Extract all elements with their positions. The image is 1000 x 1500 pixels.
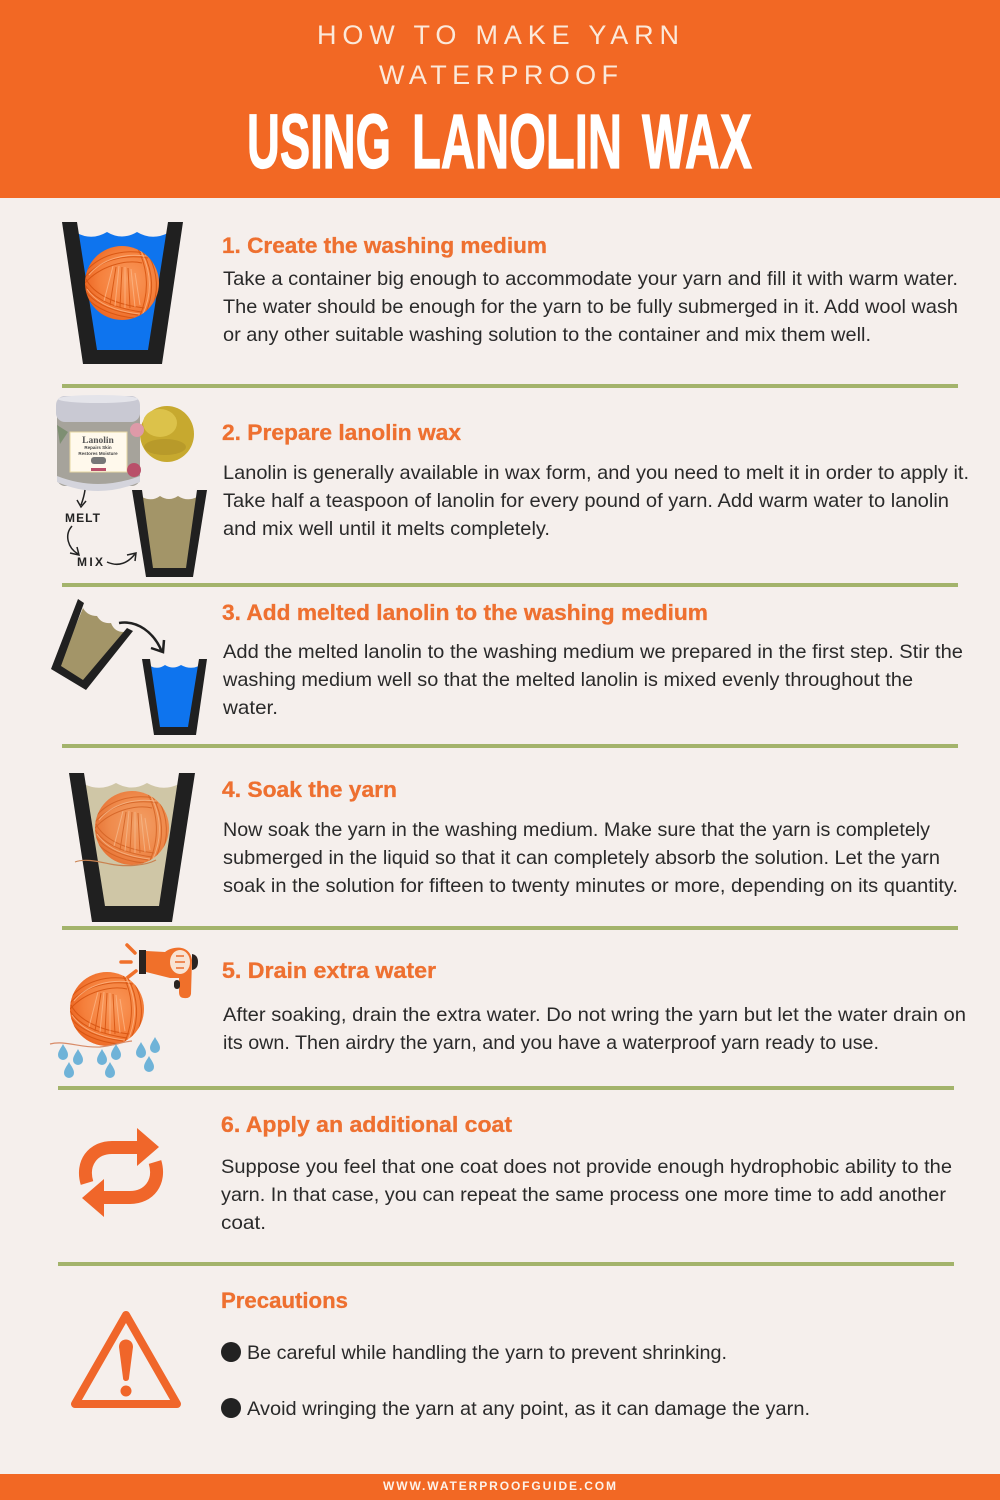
step 6 text xyxy=(221,1112,952,1234)
step 5 text: its own. Then airdry the yarn, and you have a waterproof yarn ready to use. xyxy=(223,1032,879,1054)
tilted glass of lanolin xyxy=(51,599,133,690)
step 2 text: 2. Prepare lanolin wax xyxy=(222,420,462,445)
lanolin wax blob xyxy=(140,406,194,462)
precautions icon: warning triangle xyxy=(75,1315,177,1404)
title: how to make yarn waterproof: HOW TO MAKE YARN xyxy=(317,20,679,50)
arrow: melt to mix xyxy=(68,526,79,555)
label: melt: MELT xyxy=(65,511,101,525)
title: using lanolin wax: WAX xyxy=(642,99,752,185)
pink flowers on jar xyxy=(127,423,144,477)
lanolin jar: Repairs Skin xyxy=(84,445,112,450)
loose thread xyxy=(50,1041,132,1047)
step 1 text: Take a container big enough to accommodate your yarn and fill it with warm water. xyxy=(223,268,958,290)
step 2 text: Lanolin is generally available in wax form, and you need to melt it in order to apply it. xyxy=(223,462,969,484)
footer bar xyxy=(0,1474,1000,1500)
title: using lanolin wax xyxy=(247,99,752,185)
step 1 text xyxy=(222,233,958,346)
label: mix: MIX xyxy=(77,555,103,569)
lanolin jar: Restores Moisture xyxy=(78,451,118,456)
step 2 text xyxy=(222,420,969,540)
step 5 text: 5. Drain extra water xyxy=(222,958,436,983)
step 2 icon: lanolin jar, melt and mix xyxy=(56,395,207,577)
step 3 text: 3. Add melted lanolin to the washing medium xyxy=(222,600,708,625)
title: how to make yarn waterproof: WATERPROOF xyxy=(379,60,618,90)
step 5 text: After soaking, drain the extra water. Do not wring the yarn but let the water drain on xyxy=(223,1004,966,1026)
title: using lanolin wax: USING xyxy=(247,99,391,185)
step 2 text: and mix well until it melts completely. xyxy=(223,518,550,540)
water drops xyxy=(58,1037,160,1078)
precautions text: Be careful while handling the yarn to prevent shrinking. xyxy=(247,1342,727,1364)
step 3 text: water. xyxy=(222,697,278,719)
step 2 text: Take half a teaspoon of lanolin for every pound of yarn. Add warm water to lanolin xyxy=(223,490,949,512)
step 3 text: washing medium well so that the melted lanolin is mixed evenly throughout the xyxy=(222,669,913,691)
lanolin jar: Lanolin xyxy=(82,436,115,446)
precautions text: Avoid wringing the yarn at any point, as it can damage the yarn. xyxy=(247,1398,810,1420)
step 3 icon: pouring lanolin into water xyxy=(51,599,207,735)
lanolin jar xyxy=(56,395,140,491)
step 6 icon: repeat arrows xyxy=(82,1128,159,1217)
step 1 text: 1. Create the washing medium xyxy=(222,233,547,258)
step 4 text xyxy=(222,777,958,897)
step 6 text: 6. Apply an additional coat xyxy=(221,1112,513,1137)
step 1 icon: glass of water with yarn xyxy=(62,222,183,364)
step 1 text: or any other suitable washing solution to the container and mix them well. xyxy=(223,324,871,346)
step 4 text: submerged in the liquid so that it can completely absorb the solution. Let the yarn xyxy=(223,847,940,869)
footer bar: WWW.WATERPROOFGUIDE.COM xyxy=(383,1479,616,1493)
arrow: jar to melt xyxy=(77,490,86,507)
step 4 text: 4. Soak the yarn xyxy=(222,777,397,802)
step 1 text: The water should be enough for the yarn to be fully submerged in it. Add wool wash xyxy=(223,296,958,318)
title: using lanolin wax: LANOLIN xyxy=(412,99,622,185)
step 6 text: coat. xyxy=(221,1212,266,1234)
curved arrow xyxy=(119,623,164,652)
small glass of water xyxy=(142,659,207,735)
header banner xyxy=(0,0,1000,198)
yarn ball xyxy=(70,972,144,1046)
step 3 text: Add the melted lanolin to the washing medium we prepared in the first step. Stir the xyxy=(223,641,963,663)
precautions text xyxy=(221,1288,810,1420)
precautions text: Precautions xyxy=(221,1288,348,1313)
title: how to make yarn waterproof xyxy=(317,20,679,90)
step 6 text: yarn. In that case, you can repeat the same process one more time to add another xyxy=(221,1184,947,1206)
step 6 text: Suppose you feel that one coat does not provide enough hydrophobic ability to the xyxy=(221,1156,952,1178)
hair dryer xyxy=(121,945,198,998)
step 5 icon: yarn, hair dryer and drops xyxy=(50,945,198,1078)
step 3 text xyxy=(222,600,963,719)
step 5 text xyxy=(222,958,966,1054)
step 4 text: Now soak the yarn in the washing medium. Make sure that the yarn is completely xyxy=(223,819,930,841)
step 4 text: soak in the solution for fifteen to twenty minutes or more, depending on its quantity. xyxy=(223,875,958,897)
step 4 icon: yarn soaking xyxy=(69,773,195,922)
arrow: mix to glass xyxy=(107,553,136,564)
glass of melted lanolin xyxy=(132,490,207,577)
